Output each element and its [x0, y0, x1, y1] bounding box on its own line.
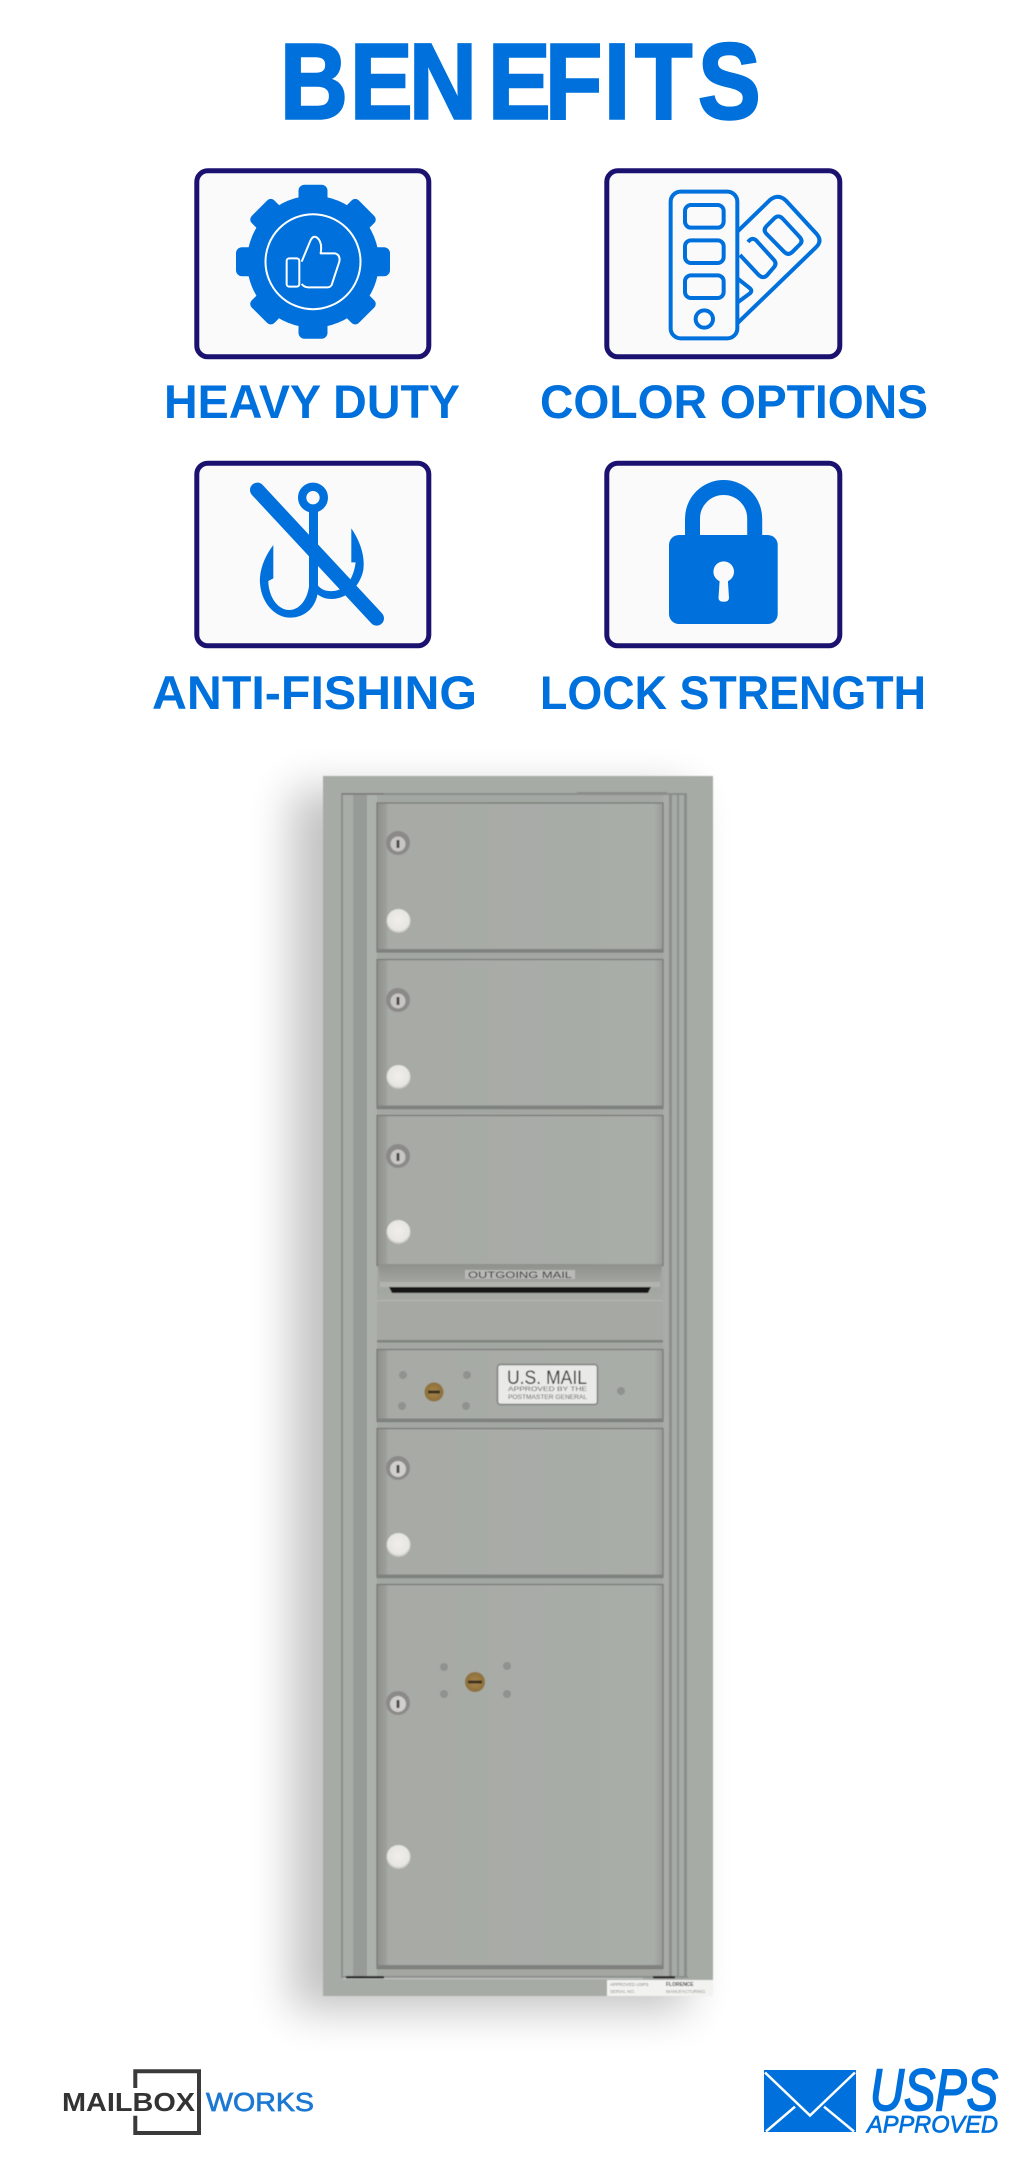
icon frame: lock strength: [607, 463, 840, 646]
door 5: [377, 1428, 663, 1578]
body: [323, 776, 713, 1996]
logo: mailbox works: MAILBOX: [62, 2087, 196, 2117]
logo: usps approved: APPROVED: [865, 2112, 998, 2138]
mailbox shadow: [292, 790, 688, 2010]
label: anti-fishing: ANTI-FISHING: [152, 666, 477, 719]
title: BENEFITS: [280, 21, 761, 142]
icon: envelope: [764, 2070, 856, 2132]
usps plate: [498, 1364, 598, 1404]
icon: gear with thumbs up: [236, 185, 390, 339]
label: color options: COLOR OPTIONS: [540, 375, 928, 428]
logo: usps approved: USPS: [870, 2058, 998, 2123]
usps plate: POSTMASTER GENERAL: [508, 1395, 588, 1401]
manufacturer label: [607, 1980, 713, 1996]
door 1: [377, 803, 663, 952]
panel: color options: [607, 171, 840, 357]
icon frame: heavy duty: [197, 171, 429, 357]
icon: padlock: [669, 487, 778, 624]
icon frame: color options: [607, 171, 840, 357]
outgoing mail flap: [378, 1264, 662, 1293]
usps plate: APPROVED BY THE: [508, 1387, 587, 1393]
door 4 with postal plate: [377, 1350, 663, 1422]
collection panel: [377, 1293, 663, 1342]
door 6 parcel locker: [377, 1584, 663, 1968]
panel: anti-fishing: [197, 463, 429, 646]
logo: mailbox works: WORKS: [206, 2087, 314, 2117]
icon frame: anti-fishing: [197, 463, 429, 646]
logo: mailbox works: [62, 2071, 314, 2133]
usps plate: U.S. MAIL: [507, 1368, 587, 1389]
manufacturer label: SERIAL NO.: [610, 1989, 635, 1994]
outgoing mail flap: OUTGOING MAIL: [468, 1270, 572, 1281]
label: lock strength: LOCK STRENGTH: [540, 666, 926, 719]
logo: usps approved: [764, 2058, 998, 2138]
icon: color swatches: [671, 192, 819, 338]
panel: heavy duty: [197, 171, 429, 357]
door 2: [377, 960, 663, 1108]
label: heavy duty: HEAVY DUTY: [164, 375, 460, 428]
manufacturer label: MANUFACTURING: [666, 1989, 706, 1994]
icon: crossed-out fish hook: [257, 487, 377, 618]
mailbox unit: [323, 776, 713, 1996]
manufacturer label: APPROVED USPS: [610, 1982, 649, 1987]
panel: lock strength: [607, 463, 840, 646]
door 3: [377, 1116, 663, 1266]
manufacturer label: FLORENCE: [666, 1982, 694, 1988]
